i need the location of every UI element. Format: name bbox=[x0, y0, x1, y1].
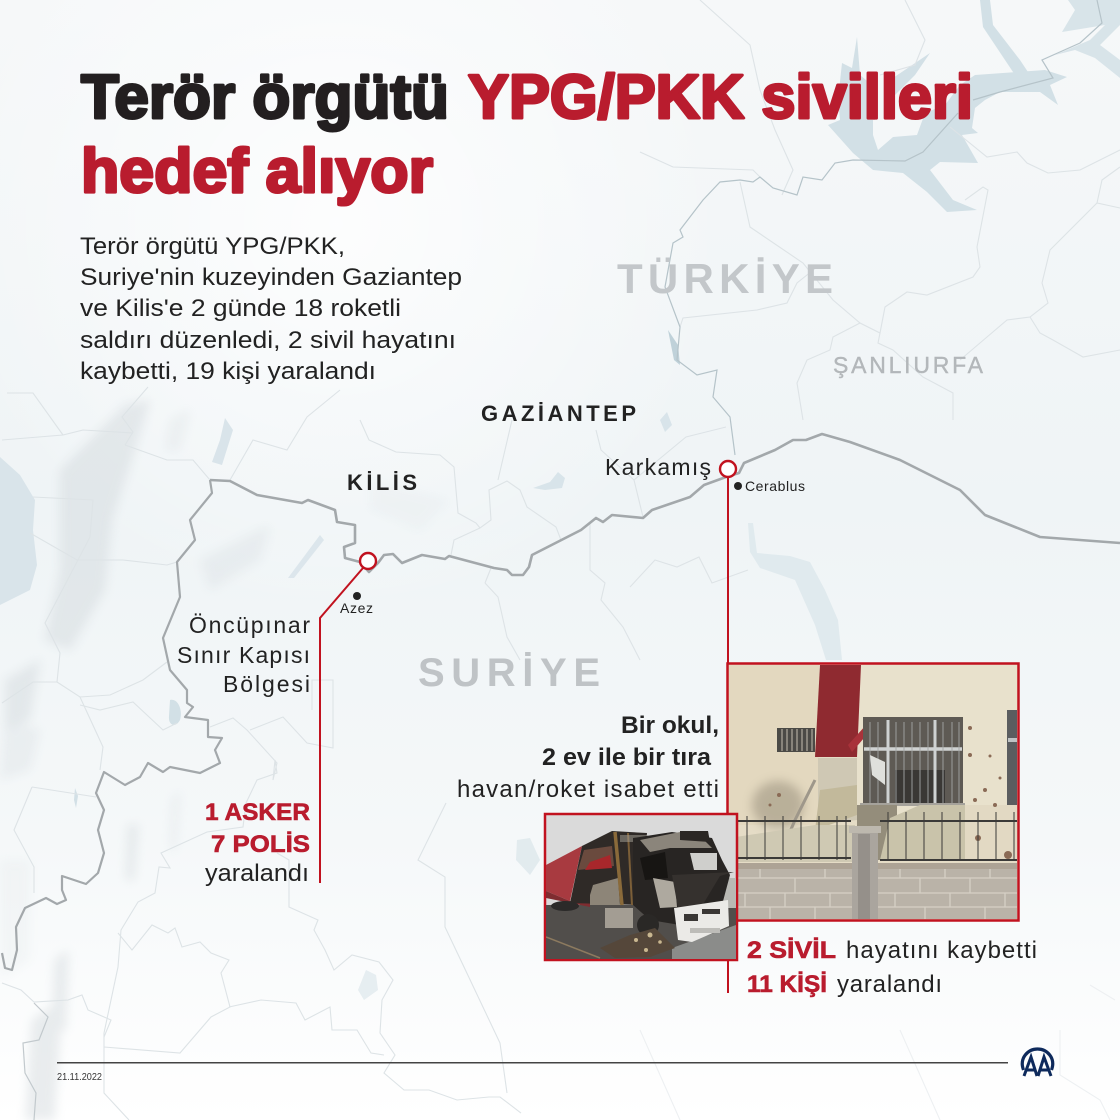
intro text: Terör örgütü YPG/PKK, bbox=[80, 233, 345, 260]
place label: Karkamış: Karkamış bbox=[605, 454, 711, 480]
casualties: Öncüpınar: 1 ASKER bbox=[205, 799, 310, 826]
broken column bbox=[818, 758, 857, 825]
red panel bbox=[815, 665, 861, 757]
province label: Kilis: KİLİS bbox=[347, 470, 417, 495]
text: hit targets: 2 ev ile bir tıra bbox=[542, 744, 712, 771]
photo: burned truck bbox=[545, 814, 737, 960]
place: Azez bbox=[340, 592, 373, 616]
casualties: Karkamış bbox=[747, 937, 1037, 998]
place: Azez: Azez bbox=[340, 600, 373, 616]
marker: Öncüpınar bbox=[360, 553, 376, 569]
text: hit targets: Bir okul, bbox=[621, 712, 719, 739]
gate post bbox=[852, 827, 878, 920]
map border line bbox=[2, 434, 1120, 970]
country label: Suriye: SURİYE bbox=[418, 651, 600, 695]
intro text bbox=[80, 233, 462, 385]
title line 1 red: YPG/PKK sivilleri bbox=[468, 63, 973, 132]
callout lines bbox=[320, 478, 728, 993]
intro text: Suriye'nin kuzeyinden Gaziantep bbox=[80, 264, 462, 291]
intro text: kaybetti, 19 kişi yaralandı bbox=[80, 358, 376, 385]
wheels and chassis bbox=[637, 915, 659, 932]
bumper bbox=[674, 900, 729, 942]
marker: Karkamış bbox=[720, 461, 736, 477]
label: Öncüpınar Sınır Kapısı Bölgesi bbox=[177, 612, 310, 697]
cab bbox=[633, 832, 730, 925]
label: Öncüpınar Sınır Kapısı Bölgesi: Bölgesi bbox=[223, 671, 310, 697]
pock marks bbox=[768, 726, 1012, 859]
footer rule bbox=[57, 1062, 1008, 1064]
blast mark bbox=[752, 781, 804, 829]
casualties: Karkamış: 11 KİŞİ bbox=[747, 971, 827, 998]
title bbox=[81, 63, 973, 206]
burned cargo bbox=[570, 831, 647, 905]
terrain shading bbox=[0, 400, 450, 1120]
title line 1 dark: Terör örgütü bbox=[81, 63, 449, 132]
lower wall bbox=[738, 869, 1017, 919]
debris bbox=[600, 928, 675, 958]
label: Öncüpınar Sınır Kapısı Bölgesi: Sınır Kapısı bbox=[177, 642, 310, 668]
intro text: ve Kilis'e 2 günde 18 roketli bbox=[80, 295, 401, 322]
casualties: Öncüpınar: yaralandı bbox=[205, 860, 309, 887]
text: hit targets: havan/roket isabet etti bbox=[457, 776, 719, 803]
casualties: Öncüpınar bbox=[205, 799, 310, 887]
text: hit targets bbox=[457, 712, 719, 803]
trailer bbox=[546, 846, 582, 901]
main window bbox=[863, 717, 963, 804]
casualties: Karkamış: yaralandı bbox=[837, 971, 942, 998]
title line 2 red: hedef alıyor bbox=[81, 137, 433, 206]
fence bbox=[737, 812, 1017, 860]
province label: Şanlıurfa: ŞANLIURFA bbox=[833, 352, 984, 378]
intro text: saldırı düzenledi, 2 sivil hayatını bbox=[80, 327, 456, 354]
ground bbox=[546, 905, 736, 959]
label: Öncüpınar Sınır Kapısı Bölgesi: Öncüpınar bbox=[189, 612, 310, 638]
date: 21.11.2022 bbox=[57, 1071, 102, 1083]
water bodies bbox=[0, 418, 324, 605]
province label: Gaziantep: GAZİANTEP bbox=[481, 401, 636, 426]
right window bbox=[1007, 710, 1017, 805]
casualties: Karkamış: hayatını kaybetti bbox=[846, 937, 1037, 964]
icon: AA logo bbox=[1022, 1049, 1053, 1076]
vent bbox=[777, 728, 815, 752]
casualties: Karkamış: 2 SİVİL bbox=[747, 937, 836, 964]
place: Cerablus: Cerablus bbox=[745, 478, 805, 494]
casualties: Öncüpınar: 7 POLİS bbox=[211, 831, 310, 858]
country label: Türkiye: TÜRKİYE bbox=[617, 255, 833, 302]
wall below window bbox=[857, 805, 897, 860]
photo: damaged school bbox=[728, 664, 1018, 920]
